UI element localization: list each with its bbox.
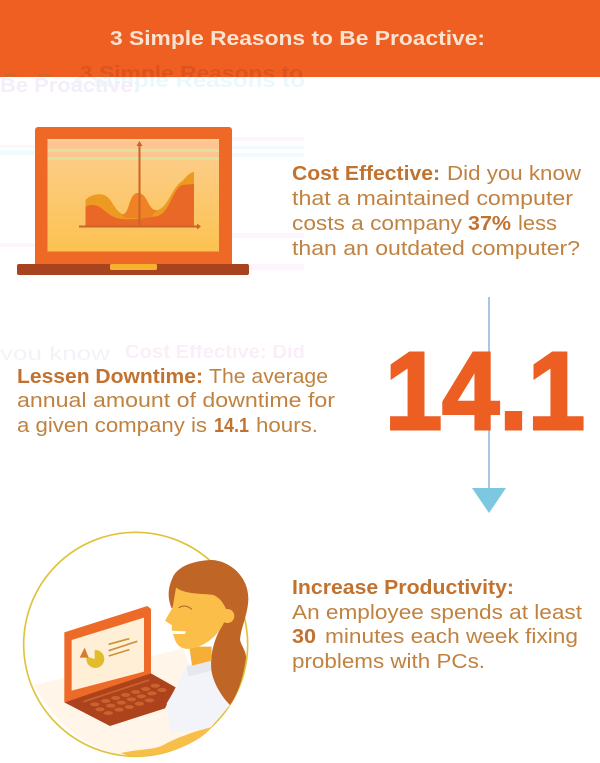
- text: cost effective: than an outdated computer?: [292, 238, 580, 260]
- smile: [171, 631, 186, 634]
- scene and laptop: [24, 532, 248, 756]
- ghost title artifact: Be Proactive:: [0, 75, 140, 97]
- big number 14.1: 14.1: [385, 330, 585, 453]
- ghost title inside header: 3 Simple Reasons to: [80, 63, 303, 85]
- ghost title artifact: 3 Simple Reasons to: [70, 70, 305, 92]
- face: [165, 588, 227, 649]
- ghost title artifact: [0, 70, 305, 97]
- laptop: [64, 606, 176, 726]
- ghost title inside header: Be Proactive:: [3, 71, 143, 93]
- ghost text artifact: [0, 345, 304, 360]
- text: increase productivity: minutes each week fixing: [325, 626, 578, 648]
- text: lessen downtime: 14.1: [214, 415, 249, 437]
- text: cost effective: [292, 163, 582, 260]
- illustration: woman with laptop: [24, 532, 248, 756]
- ear: [220, 609, 234, 623]
- text: increase productivity: An employee spends at least: [292, 602, 582, 624]
- text: increase productivity: 30: [292, 626, 316, 648]
- text: cost effective: that a maintained computer: [292, 188, 573, 210]
- text: cost effective: Did you know: [447, 163, 582, 185]
- text: lessen downtime: Lessen Downtime:: [17, 366, 203, 388]
- compression bands: [0, 137, 304, 270]
- woman: [165, 560, 248, 733]
- text: cost effective: Cost Effective:: [292, 163, 440, 185]
- title: 3 Simple Reasons to Be Proactive:: [110, 28, 485, 50]
- yellow sleeve: [121, 727, 212, 756]
- circle frame: [24, 532, 248, 756]
- desk: [35, 648, 210, 756]
- eye: [179, 606, 192, 609]
- laptop illustration: [17, 127, 249, 275]
- neck: [189, 647, 212, 666]
- text: increase productivity: [292, 577, 582, 673]
- header banner: [0, 0, 600, 77]
- text: lessen downtime: a given company is: [17, 415, 207, 437]
- text: lessen downtime: [17, 366, 335, 437]
- text: cost effective: 37%: [468, 213, 511, 235]
- text: lessen downtime: hours.: [256, 415, 318, 437]
- shirt: [167, 660, 230, 733]
- text: lessen downtime: annual amount of downtime for: [17, 390, 335, 412]
- text: increase productivity: Increase Productivity:: [292, 577, 514, 599]
- hair: [169, 560, 248, 705]
- text: cost effective: costs a company: [292, 213, 462, 235]
- text: cost effective: less: [518, 213, 557, 235]
- arrow: [472, 297, 506, 513]
- ghost text artifact: Cost Effective: Did: [125, 342, 305, 363]
- collar: [187, 660, 213, 677]
- text: lessen downtime: The average: [209, 366, 328, 388]
- text: increase productivity: problems with PCs.: [292, 651, 485, 673]
- ghost text artifact: you know: [0, 344, 110, 365]
- ghost title inside header: [4, 65, 302, 77]
- area chart: [79, 141, 201, 230]
